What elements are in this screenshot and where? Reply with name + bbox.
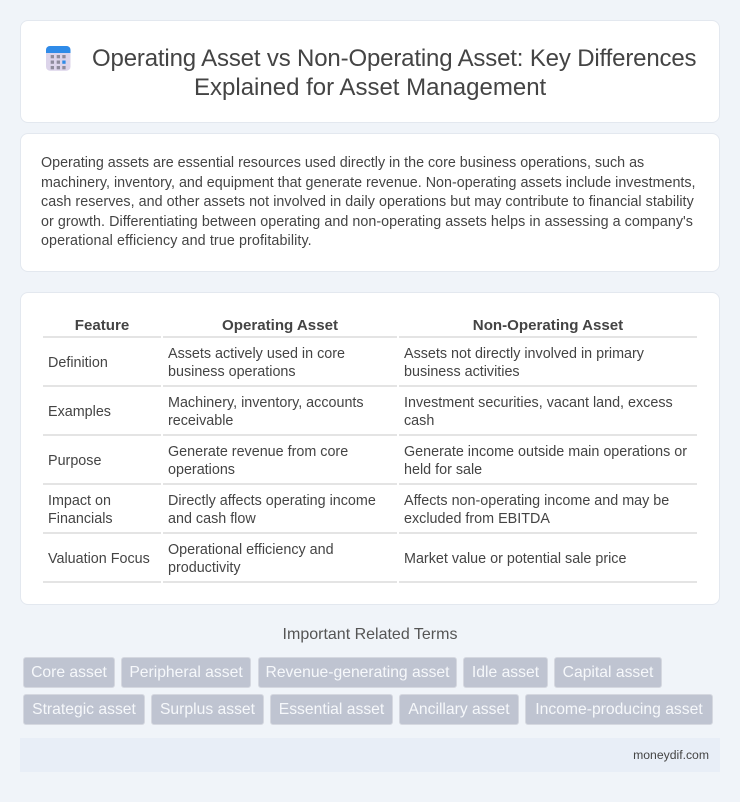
tag: Core asset (23, 657, 115, 688)
footer: source: moneydif.com (633, 748, 709, 762)
row label: Impact on Financials: Financials (48, 511, 113, 527)
cell: operating examples (168, 395, 364, 429)
cell: non-operating definition (404, 346, 644, 380)
cell: non-operating valuation: Market value or potential sale price (404, 551, 626, 567)
tag: Capital asset (554, 657, 662, 688)
icon: calendar (46, 46, 70, 71)
text: description: cash reserves, and other assets not involved in daily operations but may contribute to financial stability (41, 194, 694, 210)
panel: description (20, 133, 720, 272)
row label: Valuation Focus: Valuation Focus (48, 551, 150, 567)
cell: operating examples: Machinery, inventory, accounts (168, 395, 364, 411)
cell: non-operating purpose (404, 444, 687, 478)
panel: header (20, 20, 720, 123)
panel: comparison table (20, 292, 720, 605)
cell: operating definition: business operations (168, 364, 296, 380)
tag: Revenue-generating asset (258, 657, 457, 688)
text: description: operational efficiency and true profitability. (41, 233, 312, 249)
cell: operating impact: and cash flow (168, 511, 256, 527)
cell: operating impact (168, 493, 376, 527)
row label: Impact on Financials: Impact on (48, 493, 111, 509)
cell: non-operating examples: Investment securities, vacant land, excess (404, 395, 673, 411)
row label: Definition: Definition (48, 355, 108, 371)
cell: operating impact: Directly affects operating income (168, 493, 376, 509)
tag: Surplus asset: Surplus asset (160, 701, 255, 718)
tag: Strategic asset: Strategic asset (32, 701, 136, 718)
cell: non-operating impact: excluded from EBITDA (404, 511, 550, 527)
table header: Operating Asset: Operating Asset (222, 317, 338, 334)
cell: non-operating definition: Assets not directly involved in primary (404, 346, 644, 362)
cell: operating definition: Assets actively used in core (168, 346, 345, 362)
tag: Revenue-generating asset: Revenue-generating asset (265, 664, 450, 681)
cell: non-operating impact (404, 493, 669, 527)
tag: Peripheral asset: Peripheral asset (129, 664, 243, 681)
tag: Peripheral asset (121, 657, 251, 688)
heading: related terms: Important Related Terms (283, 626, 457, 643)
cell: non-operating definition: business activities (404, 364, 520, 380)
tag: Ancillary asset: Ancillary asset (408, 701, 510, 718)
title: Explained for Asset Management (194, 74, 546, 101)
cell: operating definition (168, 346, 345, 380)
text: description: machinery, inventory, and equipment that generate revenue. Non-operating assets include investments, (41, 175, 696, 191)
text: description: or growth. Differentiating between operating and non-operating assets helps in assessing a company's (41, 214, 693, 230)
tags: related terms (23, 657, 713, 725)
cell: operating valuation: Operational efficiency and (168, 542, 334, 558)
cell: operating valuation (168, 542, 334, 576)
cell: non-operating impact: Affects non-operating income and may be (404, 493, 669, 509)
cell: non-operating examples: cash (404, 413, 434, 429)
cell: operating purpose: Generate revenue from core (168, 444, 348, 460)
cell: non-operating examples (404, 395, 673, 429)
row label: Examples: Examples (48, 404, 111, 420)
tag: Income-producing asset (525, 694, 713, 725)
tag: Strategic asset (23, 694, 145, 725)
tag: Ancillary asset (399, 694, 519, 725)
table header: Feature: Feature (75, 317, 129, 334)
footer bar (20, 738, 720, 772)
cell: non-operating purpose: held for sale (404, 462, 482, 478)
cell: operating examples: receivable (168, 413, 233, 429)
tag: Essential asset: Essential asset (279, 701, 384, 718)
row label: Purpose: Purpose (48, 453, 101, 469)
tag: Core asset: Core asset (31, 664, 107, 681)
tag: Capital asset: Capital asset (563, 664, 653, 681)
cell: operating valuation: productivity (168, 560, 241, 576)
title (92, 45, 696, 101)
title: Operating Asset vs Non-Operating Asset: Key Differences (92, 45, 696, 72)
table header: Non-Operating Asset: Non-Operating Asset (473, 317, 623, 334)
tag: Income-producing asset: Income-producing asset (535, 701, 703, 718)
row label: Impact on Financials (48, 493, 113, 527)
cell: non-operating purpose: Generate income outside main operations or (404, 444, 687, 460)
text: description (41, 155, 696, 249)
cell: operating purpose: operations (168, 462, 235, 478)
text: description: Operating assets are essential resources used directly in the core business operations, such as (41, 155, 644, 171)
tag: Idle asset (463, 657, 548, 688)
tag: Essential asset (270, 694, 393, 725)
tag: Surplus asset (151, 694, 264, 725)
cell: operating purpose (168, 444, 348, 478)
tag: Idle asset: Idle asset (472, 664, 539, 681)
